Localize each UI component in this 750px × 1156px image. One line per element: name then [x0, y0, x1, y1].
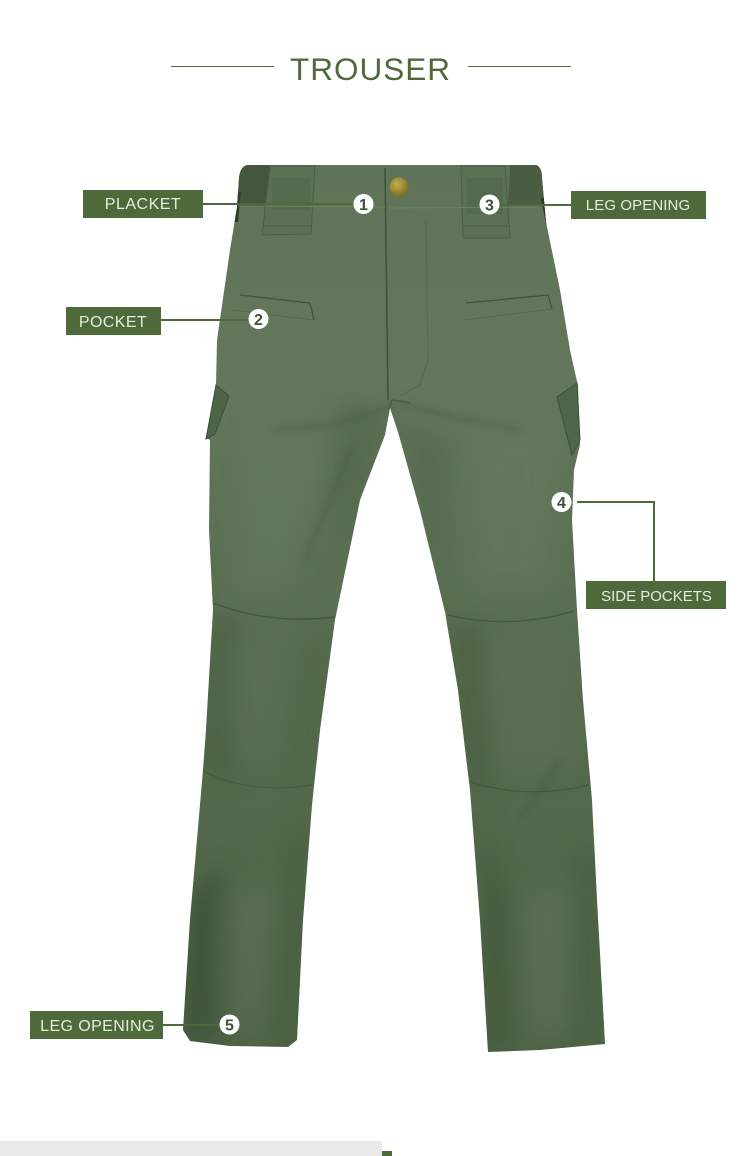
creases	[390, 408, 391, 409]
callout 4: side pockets	[552, 492, 726, 609]
callout 5: leg opening lower: 5	[225, 1018, 234, 1034]
callout 1: placket: PLACKET	[105, 196, 181, 213]
callout 2: pocket	[66, 307, 268, 335]
callout 4: side pockets: 4	[557, 495, 566, 512]
callout 1: placket	[83, 190, 374, 218]
leg shading	[180, 400, 606, 1050]
waistband	[236, 165, 270, 206]
callout 2: pocket: POCKET	[79, 314, 147, 331]
bottom strip	[0, 1141, 392, 1156]
belt loops	[262, 166, 315, 235]
callout 2: pocket: 2	[254, 312, 263, 329]
callout 3: leg opening upper	[480, 191, 706, 219]
cargo pocket flaps	[206, 385, 229, 439]
hip pockets	[240, 295, 314, 320]
button	[390, 178, 408, 196]
title: TROUSER	[290, 51, 451, 87]
callout 1: placket: 1	[359, 197, 368, 214]
callout 4: side pockets: SIDE POCKETS	[601, 588, 712, 605]
knee seams	[213, 603, 335, 619]
callout 3: leg opening upper: 3	[485, 198, 494, 214]
trousers illustration	[180, 165, 606, 1052]
callout 5: leg opening lower: LEG OPENING	[40, 1018, 155, 1035]
callout 5: leg opening lower	[30, 1011, 240, 1039]
fly	[385, 168, 388, 400]
callout 3: leg opening upper: LEG OPENING	[586, 197, 690, 214]
